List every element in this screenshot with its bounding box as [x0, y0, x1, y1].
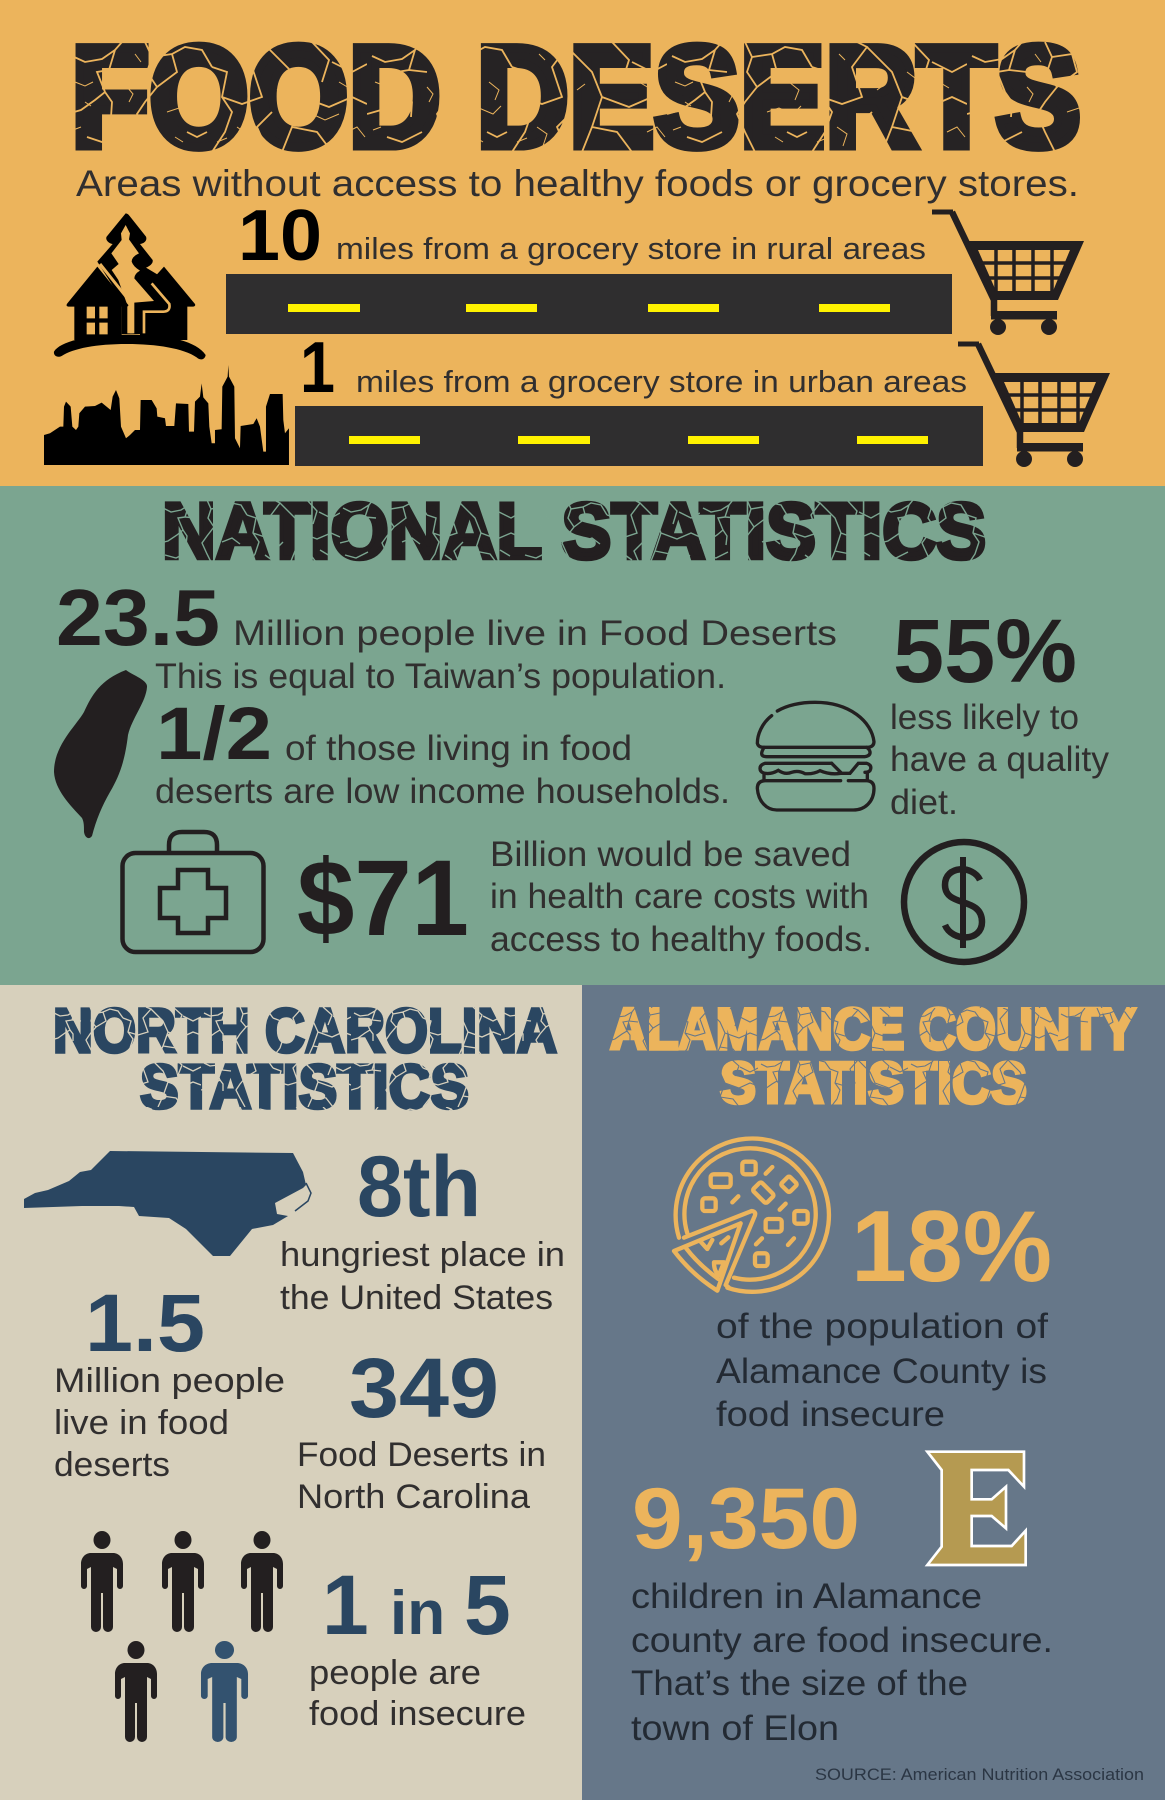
- text: hungriest place: hungriest place in: [280, 1236, 565, 1274]
- icon: house and tree: [54, 213, 206, 359]
- text: quality diet: diet.: [890, 783, 958, 822]
- text: people are food insecure: [309, 1654, 526, 1733]
- stat: 8th: 8th: [357, 1139, 481, 1235]
- text: taiwan comparison: This is equal to Taiwan’s population.: [155, 657, 726, 696]
- text: alamance food insecure: food insecure: [716, 1395, 945, 1434]
- heading: north carolina statistics: NORTH CAROLINA: [53, 997, 557, 1066]
- icon: elon letter E: [927, 1452, 1026, 1565]
- subtitle: Areas without access to healthy foods or grocery stores.: [76, 163, 1079, 204]
- stat: 71 dollars: $71: [297, 837, 469, 958]
- heading: national statistics: NATIONAL STATISTICS: [162, 486, 986, 575]
- text: billion saved: Billion would be saved: [490, 835, 851, 874]
- text: people are food insecure: food insecure: [309, 1695, 526, 1733]
- icon: shopping cart rural: [932, 212, 1084, 335]
- icon: north carolina map: [24, 1151, 311, 1256]
- panel: north carolina statistics: [0, 985, 582, 1800]
- road: urban: [295, 406, 983, 466]
- text: quality diet: have a quality: [890, 740, 1110, 779]
- icon: taiwan map: [54, 670, 147, 838]
- icon: dollar coin: [904, 842, 1024, 962]
- text: children food insecure: [631, 1577, 1053, 1748]
- text: children food insecure: town of Elon: [631, 1709, 839, 1748]
- icon: city skyline: [44, 365, 289, 465]
- stat: 1.5: 1.5: [85, 1278, 205, 1369]
- text: food deserts in north carolina: Food Deserts in: [297, 1436, 546, 1474]
- stat: 9,350: 9,350: [632, 1471, 860, 1567]
- text: children food insecure: county are food insecure.: [631, 1621, 1053, 1660]
- stat: 1 mile urban: 1: [300, 328, 335, 408]
- text: food deserts in north carolina: [297, 1436, 546, 1516]
- stat: 23.5: 23.5: [56, 573, 220, 662]
- heading: alamance county statistics: STATISTICS: [720, 1051, 1027, 1116]
- icon: first aid kit: [122, 832, 264, 952]
- heading: alamance county statistics: [600, 997, 1145, 1116]
- icon: burger: [757, 702, 874, 810]
- text: people are food insecure: people are: [309, 1654, 481, 1692]
- text: billion saved: access to healthy foods.: [490, 920, 872, 959]
- text: million people: Million people live in Food Deserts: [233, 614, 837, 653]
- stat: 10 miles rural: 10: [238, 196, 322, 276]
- text: quality diet: less likely to: [890, 698, 1079, 737]
- text: billion saved: [490, 835, 872, 959]
- icon: shopping cart urban: [958, 344, 1110, 467]
- text: low income households: deserts are low income households.: [155, 772, 730, 811]
- text: billion saved: in health care costs with: [490, 877, 869, 916]
- text: hungriest place: [280, 1236, 565, 1317]
- text: children food insecure: children in Alamance: [631, 1577, 982, 1616]
- text: million people in food deserts: live in food: [54, 1404, 229, 1442]
- stat: 349: 349: [349, 1341, 499, 1435]
- text: food deserts in north carolina: North Carolina: [297, 1478, 530, 1516]
- text: million people in food deserts: deserts: [54, 1446, 170, 1484]
- source: SOURCE: American Nutrition Association: [815, 1765, 1144, 1784]
- text: of those living: of those living in food: [285, 729, 632, 768]
- label: urban distance: miles from a grocery store in urban areas: [356, 364, 967, 399]
- text: million people in food deserts: Million people: [54, 1362, 285, 1400]
- panel: alamance county statistics: [582, 985, 1165, 1800]
- stat: 55 percent: 55%: [893, 602, 1077, 702]
- panel: national statistics: [0, 486, 1165, 985]
- road: rural: [226, 274, 952, 334]
- stat: one half: 1/2: [156, 692, 272, 775]
- heading: north carolina statistics: [45, 997, 565, 1122]
- text: children food insecure: That’s the size of the: [631, 1664, 968, 1703]
- text: alamance food insecure: [716, 1307, 1048, 1434]
- stat: 1 in 5: 1: [322, 1558, 369, 1652]
- stat: 1 in 5: in: [390, 1579, 445, 1648]
- text: alamance food insecure: of the population of: [716, 1307, 1048, 1346]
- text: alamance food insecure: Alamance County is: [716, 1352, 1047, 1391]
- stat: 1 in 5: 5: [464, 1558, 511, 1652]
- stat: 18 percent: 18%: [851, 1191, 1052, 1303]
- text: hungriest place: the United States: [280, 1279, 553, 1317]
- label: rural distance: miles from a grocery store in rural areas: [336, 231, 926, 266]
- icon: five people: [81, 1531, 283, 1742]
- text: quality diet: [890, 698, 1110, 822]
- panel: food deserts intro: [0, 0, 1165, 486]
- heading: north carolina statistics: STATISTICS: [140, 1053, 469, 1122]
- text: million people in food deserts: [54, 1362, 285, 1484]
- icon: pizza: [674, 1139, 829, 1292]
